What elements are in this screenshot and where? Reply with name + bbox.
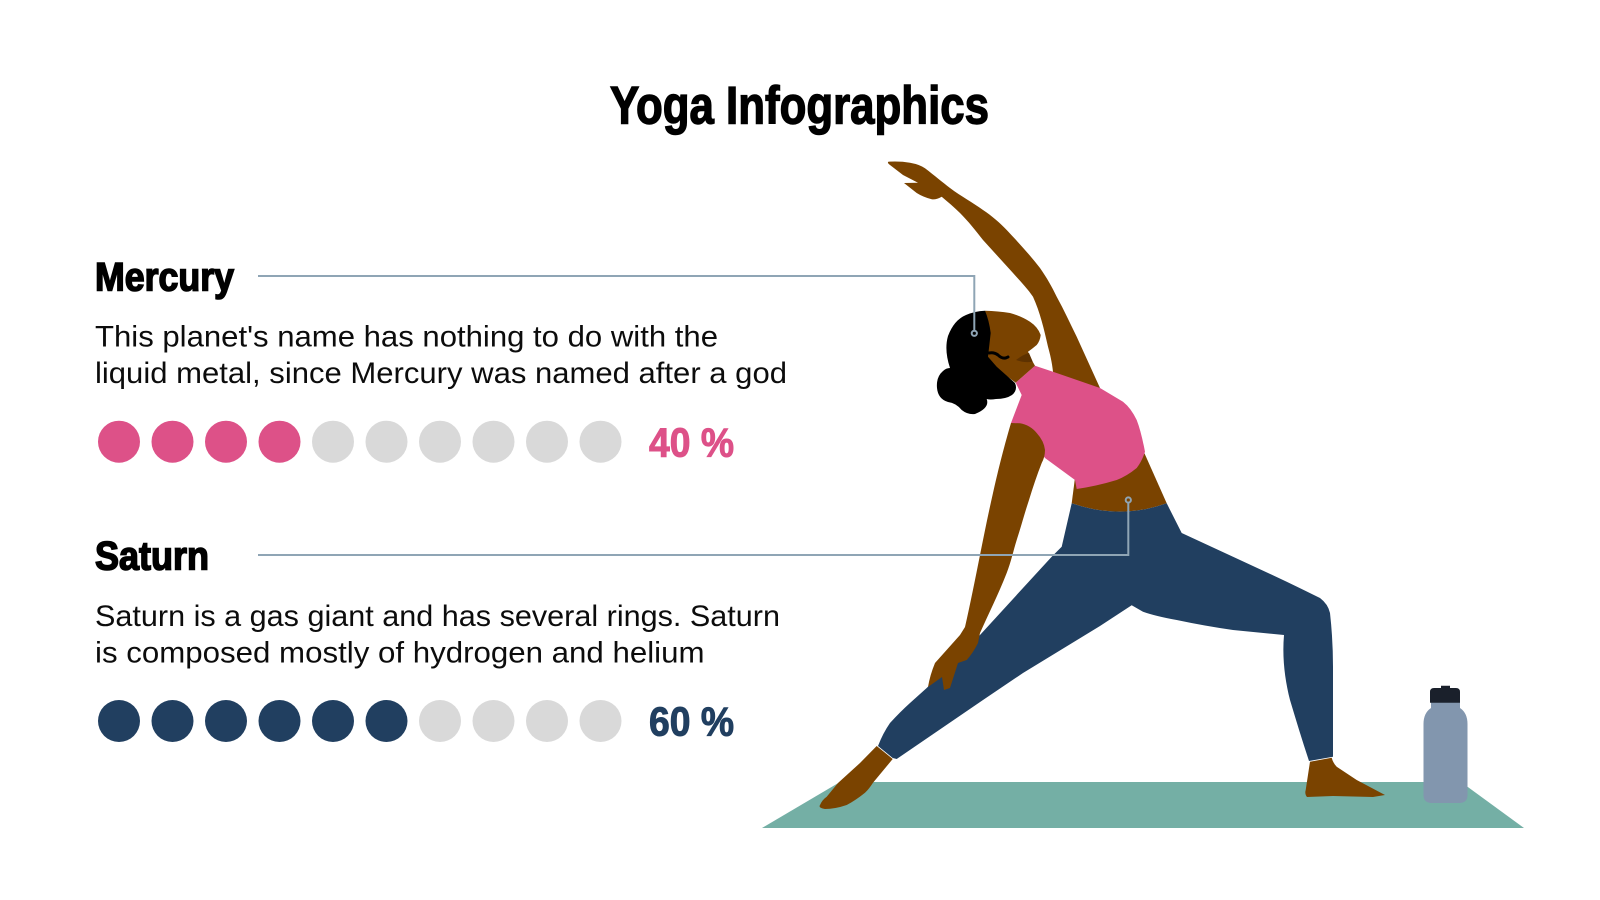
text block: Saturn description: Saturn is a gas giant and has several rings. Saturn — [95, 600, 780, 633]
text block: Mercury description — [95, 320, 787, 390]
text block: Saturn description: is composed mostly of hydrogen and helium — [95, 636, 704, 670]
heading: Mercury: Mercury — [95, 256, 235, 300]
midriff — [1072, 450, 1167, 512]
raised arm — [888, 161, 1100, 388]
chin shadow — [1016, 353, 1033, 362]
leader line: Mercury to head — [258, 276, 977, 336]
dot rating: 60 percent — [98, 700, 622, 742]
pink top — [1011, 366, 1145, 489]
back foot — [820, 746, 893, 809]
heading: Saturn: Saturn — [95, 534, 209, 578]
text block: Mercury description: This planet's name has nothing to do with the — [95, 320, 718, 354]
neck and face — [985, 311, 1041, 383]
dot rating: 40 percent — [98, 421, 622, 463]
yoga mat — [762, 782, 1524, 828]
hair — [937, 311, 1016, 414]
percentage: 60 %: 60 % — [649, 698, 734, 744]
eye — [989, 353, 1008, 358]
title: Yoga Infographics — [610, 76, 989, 136]
front foot — [1305, 758, 1385, 797]
water bottle — [1424, 686, 1468, 803]
front arm and hand — [928, 423, 1045, 690]
leader line: Saturn to waist — [258, 497, 1131, 555]
panel: Saturn — [95, 534, 780, 744]
panel: Mercury — [95, 256, 787, 466]
yoga figure — [820, 161, 1385, 809]
text block: Mercury description: liquid metal, since Mercury was named after a god — [95, 357, 787, 390]
text block: Saturn description — [95, 600, 780, 670]
leggings — [878, 503, 1333, 761]
percentage: 40 %: 40 % — [649, 420, 734, 466]
